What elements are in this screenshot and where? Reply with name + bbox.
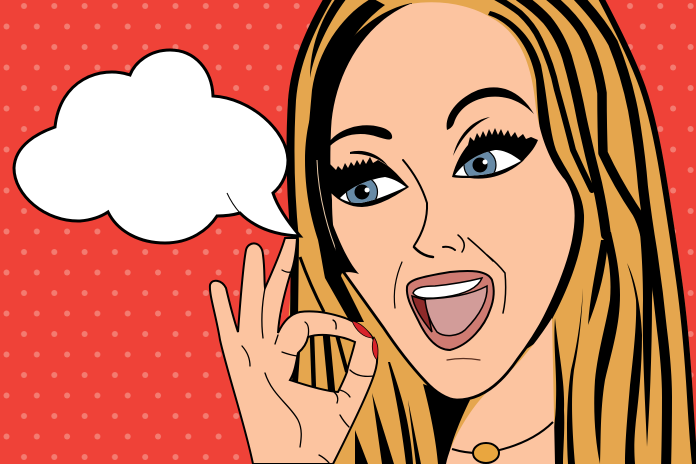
hair: [285, 0, 696, 464]
lower hair strands: [355, 362, 470, 464]
thin highlight in black band: [317, 160, 344, 268]
left eye sclera: [340, 177, 406, 203]
jaw line: [342, 260, 570, 400]
main black band left of face: [305, 3, 412, 322]
left eye lashes and lid: [328, 157, 409, 207]
index fingernail: [352, 321, 373, 338]
speech bubble: [14, 50, 300, 243]
right eye iris: [464, 152, 497, 176]
hand: [210, 238, 378, 464]
right eye lashes and lid: [452, 128, 538, 179]
left eye iris: [346, 180, 378, 203]
strand tails: [549, 232, 652, 464]
lips: [407, 271, 494, 350]
face: [330, 2, 575, 400]
nose: [403, 160, 493, 261]
left eye upper arc: [350, 151, 388, 166]
hair outer outline left: [291, 0, 329, 320]
black band right of face: [488, 11, 584, 352]
right eye sclera: [455, 150, 521, 176]
right eye upper arc: [453, 117, 490, 156]
thumb fingernail: [372, 337, 378, 360]
necklace: [452, 422, 553, 463]
hand shape with finger ring: [210, 238, 377, 464]
tongue: [425, 286, 487, 336]
left eye: [328, 151, 409, 208]
face creases: [394, 255, 506, 360]
mouth: [407, 271, 494, 350]
teeth: [413, 278, 482, 298]
hair silhouette: [285, 0, 696, 464]
right eye: [452, 117, 538, 181]
hair strands seen through fingers: [295, 257, 347, 395]
left eyebrow: [329, 125, 392, 147]
hair wisp over cheek: [333, 225, 359, 274]
hand crease lines: [242, 270, 374, 464]
top left strands: [310, 0, 347, 78]
right eyebrow: [447, 87, 534, 130]
right hair strands: [495, 0, 667, 464]
hair outer outline right: [601, 0, 696, 464]
mouth interior dark: [412, 296, 432, 332]
neck: [446, 318, 555, 464]
